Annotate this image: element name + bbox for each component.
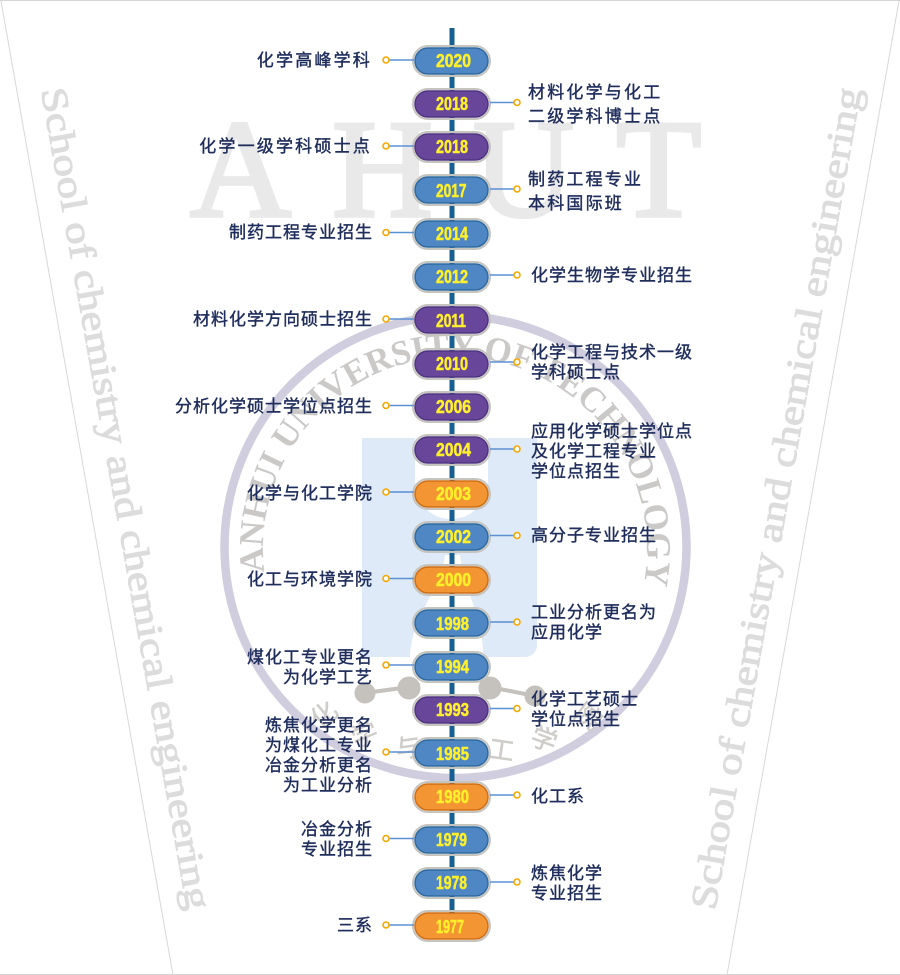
pill 2018 — [413, 89, 490, 119]
label — [531, 422, 693, 481]
milestone 2017 — [413, 170, 643, 213]
connector — [383, 402, 414, 408]
pill 1978 — [413, 868, 490, 898]
pill 2014: 2014 — [436, 224, 468, 244]
label: 专业招生 — [531, 884, 603, 903]
milestone 2010 — [413, 343, 693, 382]
label: 高分子专业招生 — [531, 526, 657, 545]
label: 应用化学 — [531, 623, 603, 642]
connector — [490, 186, 520, 192]
pill 2006: 2006 — [436, 397, 471, 417]
connector — [490, 706, 520, 712]
pill 1985: 1985 — [436, 744, 469, 764]
connector — [383, 576, 414, 582]
label — [531, 690, 639, 729]
connector — [383, 489, 414, 495]
label: 化学高峰学科 — [257, 51, 372, 70]
watermark: left side school name: School of chemistry and chemical engineering — [32, 84, 219, 913]
pill 2000: 2000 — [436, 570, 471, 590]
milestone 1985 — [265, 716, 490, 795]
label: 应用化学硕士学位点 — [531, 422, 693, 441]
seal: curved Chinese school name: 学 — [347, 716, 382, 753]
pill 1977: 1977 — [436, 917, 464, 937]
milestone 2003 — [247, 479, 490, 509]
label: 分析化学硕士学位点招生 — [175, 397, 373, 416]
watermark: AHUT letters — [190, 92, 702, 247]
pill 2011 — [413, 305, 490, 335]
connector — [490, 532, 520, 538]
label — [531, 603, 657, 642]
pill 2011: 2011 — [436, 311, 466, 331]
milestone 1993 — [413, 690, 639, 729]
connector — [383, 836, 414, 842]
label: 化学工艺硕士 — [531, 690, 639, 709]
timeline spine — [450, 28, 454, 918]
milestone 1998 — [413, 603, 657, 642]
connector — [383, 316, 414, 322]
label — [265, 716, 373, 795]
label: 学科硕士点 — [531, 363, 621, 382]
label: 化学工程与技术一级 — [531, 343, 693, 362]
label — [531, 343, 693, 382]
university seal watermark — [220, 314, 691, 781]
label: 本科国际班 — [528, 194, 624, 213]
pill 2003: 2003 — [436, 484, 471, 504]
label: 学位点招生 — [531, 710, 621, 729]
seal: curved university name: ANHUI UNIVERSITY OF TECHNOLOGY — [240, 334, 670, 588]
pill 2020: 2020 — [436, 51, 471, 71]
watermark: AHUT letters: T — [616, 92, 702, 247]
pill 2002 — [413, 522, 490, 552]
pill 1994: 1994 — [436, 657, 469, 677]
label: 炼焦化学更名 — [265, 716, 373, 735]
label: 煤化工专业更名 — [247, 648, 373, 667]
label: 材料化学与化工 — [528, 83, 662, 102]
seal: curved Chinese school name: 工 — [486, 733, 516, 767]
connector — [383, 230, 414, 236]
pill 1993 — [413, 695, 490, 725]
label: 化学生物学专业招生 — [531, 266, 693, 285]
connector — [490, 446, 520, 452]
label: 及化学工程专业 — [531, 442, 657, 461]
seal: curved Chinese school name — [305, 695, 608, 768]
label: 为煤化工专业 — [265, 736, 373, 755]
milestone 1978 — [413, 864, 603, 903]
pill 1985 — [413, 738, 490, 768]
seal: blue emblem with flask — [362, 438, 537, 657]
seal: curved Chinese school name: 院 — [569, 697, 608, 736]
connector — [383, 143, 414, 149]
pill 1980 — [413, 782, 490, 812]
label: 炼焦化学 — [531, 864, 603, 883]
pill 1993: 1993 — [436, 700, 469, 720]
connector — [490, 619, 520, 625]
milestone 2018 master — [199, 132, 490, 162]
milestone 1977 — [337, 911, 490, 941]
pill 2018: 2018 — [436, 94, 468, 114]
seal: molecule — [355, 677, 545, 706]
label: 制药工程专业 — [528, 170, 643, 189]
label: 材料化学方向硕士招生 — [193, 310, 373, 329]
pill 2006 — [413, 392, 490, 422]
label: 化学一级学科硕士点 — [199, 137, 372, 156]
pill 2014 — [413, 219, 490, 249]
connector — [490, 359, 520, 365]
watermark: AHUT letters: A — [190, 92, 291, 247]
pill 1998 — [413, 608, 490, 638]
label: 为化学工艺 — [283, 668, 373, 687]
label: 化学与化工学院 — [247, 484, 373, 503]
label: 三系 — [337, 916, 373, 935]
label: 工业分析更名为 — [531, 603, 657, 622]
pill 2010: 2010 — [436, 354, 468, 374]
seal: curved Chinese school name: 与 — [394, 731, 424, 765]
connector — [383, 57, 414, 63]
pill 1978: 1978 — [436, 873, 467, 893]
pill 1979: 1979 — [436, 830, 467, 850]
milestone 2018 doctoral — [413, 83, 662, 126]
milestone 2000 — [247, 565, 490, 595]
label — [528, 170, 643, 213]
pill 2017: 2017 — [436, 181, 466, 201]
pill 1994 — [413, 652, 490, 682]
pill 1980: 1980 — [436, 787, 469, 807]
seal: outer ring — [224, 316, 686, 778]
connector — [490, 272, 520, 278]
milestone 2004 — [413, 422, 693, 481]
pill 2004 — [413, 435, 490, 465]
label: 二级学科博士点 — [528, 107, 662, 126]
connector — [490, 792, 520, 798]
label: 学位点招生 — [531, 462, 621, 481]
seal: curved Chinese school name: 化 — [305, 695, 344, 735]
pill 2004: 2004 — [436, 440, 471, 460]
pill 2003 — [413, 479, 490, 509]
label: 冶金分析更名 — [265, 756, 373, 775]
pill 2012: 2012 — [436, 267, 468, 287]
connector — [490, 879, 520, 885]
pill 2000 — [413, 565, 490, 595]
label: 专业招生 — [301, 840, 373, 859]
seal: curved Chinese school name: 化 — [440, 738, 466, 768]
milestone 1979 — [301, 820, 490, 859]
connector — [383, 922, 414, 928]
pill 2002: 2002 — [436, 527, 471, 547]
milestone 1980 — [413, 782, 585, 812]
pill 2010 — [413, 349, 490, 379]
connector — [383, 749, 414, 755]
pill 1998: 1998 — [436, 614, 469, 634]
label — [531, 864, 603, 903]
connector — [490, 100, 520, 106]
pill 2020 — [413, 46, 490, 76]
milestone 2011 — [193, 305, 490, 335]
label — [528, 83, 662, 126]
pill 2018 — [413, 132, 490, 162]
label — [247, 648, 373, 687]
connector — [383, 662, 414, 668]
pill 1979 — [413, 825, 490, 855]
label: 化工系 — [531, 787, 585, 806]
milestone 2002 — [413, 522, 657, 552]
milestone 1994 — [247, 648, 490, 687]
watermark: AHUT letters: U — [473, 92, 574, 247]
milestone 2020 — [257, 46, 490, 76]
seal: curved Chinese school name: 学 — [527, 721, 561, 758]
pill 2018: 2018 — [436, 137, 468, 157]
milestone 2006 — [175, 392, 490, 422]
milestone 2012 — [413, 262, 693, 292]
label: 为工业分析 — [283, 776, 373, 795]
milestone 2014 — [229, 219, 490, 249]
pill 2017 — [413, 175, 490, 205]
label: 化工与环境学院 — [247, 570, 373, 589]
label: 冶金分析 — [301, 820, 373, 839]
label: 制药工程专业招生 — [229, 223, 373, 242]
watermark: right side school name: School of chemistry and chemical engineering — [683, 84, 870, 913]
watermark: AHUT letters: H — [332, 92, 433, 247]
pill 1977 — [413, 911, 490, 941]
pill 2012 — [413, 262, 490, 292]
label — [301, 820, 373, 859]
